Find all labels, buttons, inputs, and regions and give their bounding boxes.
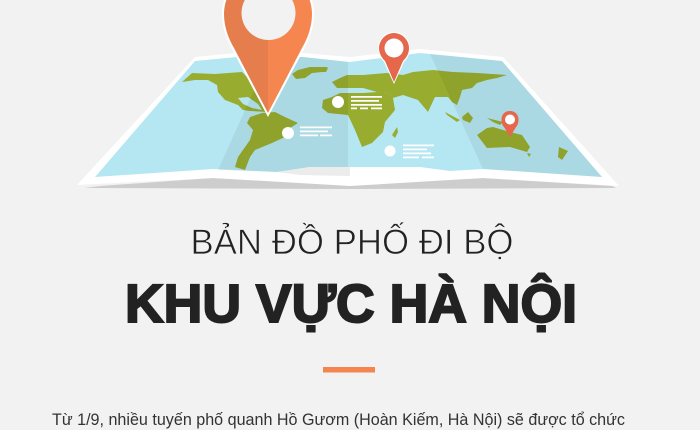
map marker: South America dot and label	[282, 126, 332, 139]
New Zealand	[558, 147, 568, 160]
Greenland	[292, 67, 328, 79]
subtitle: BẢN ĐỒ PHỐ ĐI BỘ	[190, 222, 514, 262]
Tasmania	[527, 153, 531, 157]
map paper border	[77, 49, 619, 186]
Gulf of Mexico	[238, 97, 262, 110]
New Guinea	[487, 118, 503, 125]
icon: medium red map pin	[378, 32, 410, 84]
Africa and Middle East	[322, 92, 395, 147]
map shadow	[84, 178, 616, 189]
icon: large orange map pin	[222, 0, 314, 117]
map fold shading	[218, 54, 602, 177]
intro paragraph: Từ 1/9, nhiều tuyến phố quanh Hồ Gươm (Hoàn Kiếm, Hà Nội) sẽ được tổ chức	[52, 410, 625, 429]
map ocean	[95, 53, 602, 177]
map marker: Africa dot and label	[332, 96, 382, 109]
title: KHU VỰC HÀ NỘI	[125, 273, 577, 334]
South America	[235, 112, 298, 170]
accent divider	[323, 367, 375, 372]
continents	[182, 67, 568, 170]
North America	[182, 72, 268, 112]
Madagascar	[392, 127, 398, 138]
Europe and Asia	[332, 70, 507, 112]
Indochina and Sumatra	[445, 112, 460, 122]
paper patch at lower map edge	[277, 167, 350, 176]
map marker: Indian Ocean dot and label	[384, 144, 434, 158]
Australia	[477, 127, 530, 152]
Iceland	[320, 68, 328, 72]
folded world map illustration	[77, 0, 619, 189]
icon: small red map pin	[502, 111, 518, 137]
Borneo	[462, 112, 473, 123]
